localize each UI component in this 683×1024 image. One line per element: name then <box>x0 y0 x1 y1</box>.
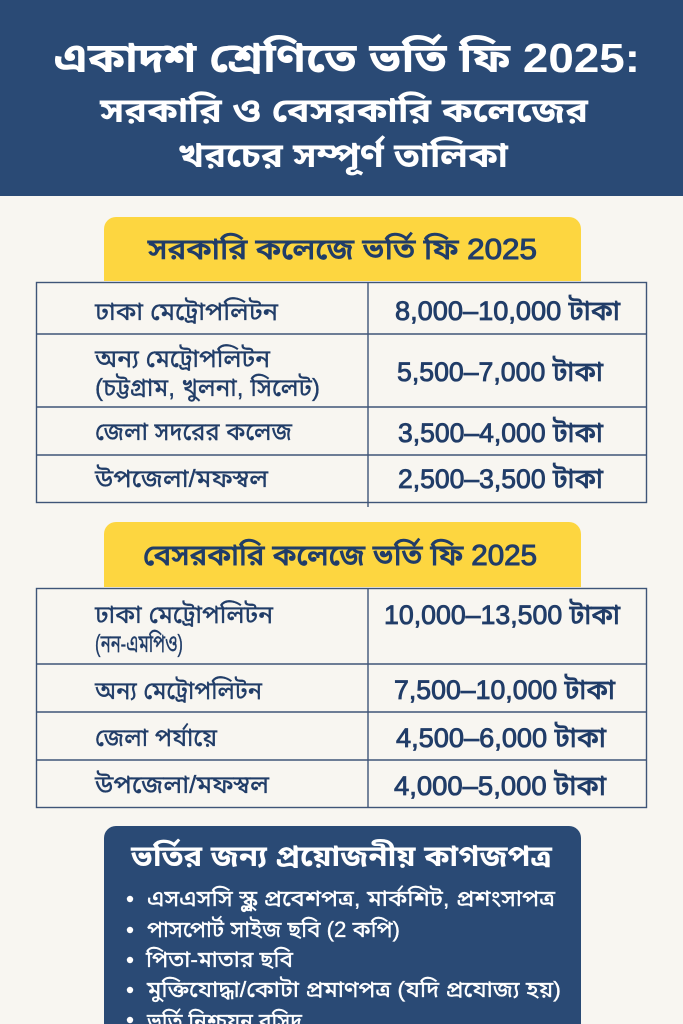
row: upazila <box>94 463 604 494</box>
row: district level: জেলা পর্যায়ে <box>95 722 217 752</box>
panel: government college heading tab: সরকারি কলেজে ভর্তি ফি 2025 <box>147 232 537 266</box>
row: Dhaka metropolitan non-MPO: 10,000–13,500 টাকা <box>384 599 621 630</box>
panel: private college heading tab <box>104 522 581 587</box>
row: other metropolitan: 5,500–7,000 টাকা <box>397 356 604 387</box>
row: other metropolitan: অন্য মেট্রোপলিটন <box>94 344 271 373</box>
panel: private college heading tab: বেসরকারি কলেজে ভর্তি ফি 2025 <box>143 538 537 572</box>
row: upazila: 4,000–5,000 টাকা <box>394 770 607 801</box>
panel: required documents <box>104 826 581 1024</box>
row: Dhaka metropolitan <box>94 295 621 326</box>
row: Dhaka metropolitan non-MPO: (নন-এমপিও) <box>95 629 183 658</box>
document list <box>127 885 561 1024</box>
row: district level: 4,500–6,000 টাকা <box>396 722 607 753</box>
table: government college fees <box>36 282 647 507</box>
header banner <box>0 0 683 196</box>
row: district level <box>95 722 607 753</box>
documents heading: ভর্তির জন্য প্রয়োজনীয় কাগজপত্র <box>130 839 553 873</box>
row: district college: 3,500–4,000 টাকা <box>398 417 604 448</box>
row: upazila <box>94 770 607 801</box>
row: Dhaka metropolitan non-MPO <box>94 599 621 658</box>
row: district college <box>95 417 604 448</box>
row: upazila: উপজেলা/মফস্বল <box>94 770 270 799</box>
row: upazila: 2,500–3,500 টাকা <box>398 463 604 494</box>
panel: government college heading tab <box>104 217 581 281</box>
row: Dhaka metropolitan: ঢাকা মেট্রোপলিটন <box>94 297 279 326</box>
title line 1: একাদশ শ্রেণিতে ভর্তি ফি 2025: <box>54 34 640 81</box>
document list: মুক্তিযোদ্ধা/কোটা প্রমাণপত্র (যদি প্রযোজ্য হয়) <box>146 977 561 1003</box>
row: Dhaka metropolitan: 8,000–10,000 টাকা <box>395 295 621 326</box>
row: upazila: উপজেলা/মফস্বল <box>94 464 269 493</box>
row: other metropolitan: 7,500–10,000 টাকা <box>394 674 616 705</box>
title line 3: খরচের সম্পূর্ণ তালিকা <box>178 135 508 177</box>
table: private college fees <box>36 588 647 808</box>
title line 2: সরকারি ও বেসরকারি কলেজের <box>99 90 589 130</box>
document list: এসএসসি স্কুল প্রবেশপত্র, মার্কশিট, প্রশংসাপত্র <box>147 885 555 913</box>
document list: পিতা-মাতার ছবি <box>145 947 294 972</box>
row: other metropolitan: অন্য মেট্রোপলিটন <box>94 676 263 705</box>
document list: পাসপোর্ট সাইজ ছবি (2 কপি) <box>147 916 400 942</box>
row: Dhaka metropolitan non-MPO: ঢাকা মেট্রোপলিটন <box>94 600 274 629</box>
row: other metropolitan <box>94 344 604 402</box>
row: other metropolitan: (চট্টগ্রাম, খুলনা, সিলেট) <box>95 373 320 402</box>
row: district college: জেলা সদরের কলেজ <box>95 418 292 446</box>
row: other metropolitan <box>94 674 616 705</box>
